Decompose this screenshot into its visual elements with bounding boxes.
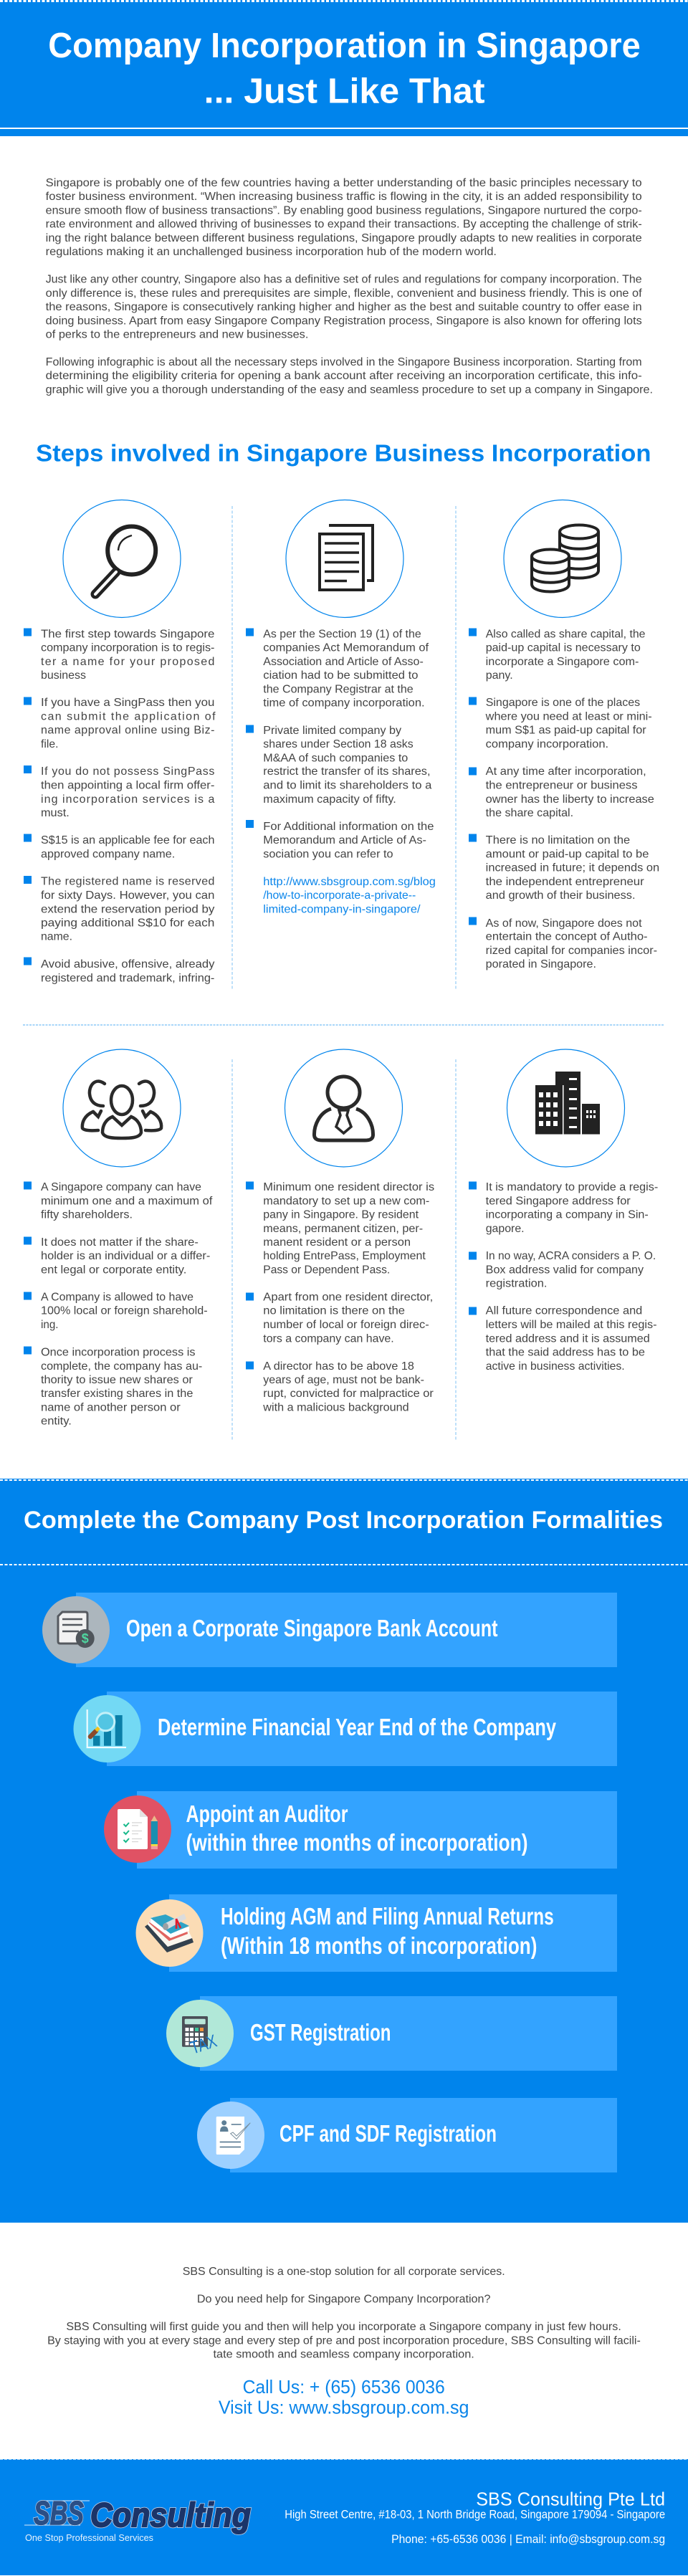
bullet list: paid-up capital: As of now, Singapore does not [486, 917, 642, 930]
bullet list: paid-up capital: pany. [486, 669, 513, 682]
bullet list: shareholders [24, 1181, 213, 1428]
bullet list: name registration: ter a name for your proposed [41, 656, 214, 668]
bullet list: registered address: tered address and it is assumed [486, 1333, 650, 1345]
bullet list: paid-up capital: and growth of their business. [486, 889, 635, 902]
bullet list: directors: mandatory to set up a new com- [263, 1195, 429, 1207]
bullet list: directors [246, 1181, 434, 1413]
bullet list: name registration [24, 628, 216, 984]
bullet list: memorandum and articles: Association and Article of Asso- [263, 656, 424, 668]
closing text block [47, 2266, 641, 2361]
bullet list: shareholders: ing. [41, 1319, 59, 1331]
bullet list: directors: number of local or foreign direc- [263, 1319, 429, 1331]
bullet list: name registration: ing incorporation services is a [41, 793, 214, 806]
bullet list: registered address: In no way, ACRA considers a P. O. [486, 1250, 656, 1262]
bullet list: memorandum and articles: time of company incorporation. [263, 697, 425, 710]
bullet list: registered address: letters will be mailed at this regis- [486, 1319, 656, 1331]
bullet list: paid-up capital: paid-up capital is necessary to [486, 642, 641, 654]
bullet list: paid-up capital: At any time after incorporation, [486, 765, 646, 778]
bullet list: shareholders: 100% local or foreign sharehold- [41, 1305, 208, 1317]
bullet list: memorandum and articles: M&AA of such companies to [263, 752, 408, 764]
logo: SBS Consulting: Consulting [90, 2496, 251, 2534]
intro text block: foster business environment. “When increasing business traffic is flowing in the city, it is an added responsibility to [46, 191, 642, 203]
icon: registration form [197, 2102, 264, 2169]
step text: auditor [186, 1800, 527, 1856]
bullet list: memorandum and articles: the Company Registrar at the [263, 683, 414, 695]
logo: SBS Consulting [24, 2494, 251, 2543]
panel: paid-up capital column [469, 500, 659, 970]
bullet list: registered address: that the said address has to be [486, 1347, 645, 1359]
bullet list: shareholders: fifty shareholders. [41, 1208, 133, 1221]
bullet list: shareholders: A Singapore company can have [41, 1181, 201, 1193]
closing text block: Do you need help for Singapore Company Incorporation? [197, 2294, 491, 2305]
panel: shareholders column [24, 1049, 213, 1428]
bullet list: shareholders: ent legal or corporate entity. [41, 1264, 186, 1276]
intro text block: rate environment and allowed thriving of businesses to expand their transactions. By accepting the challenge of strik- [46, 219, 642, 231]
step: GST registration [166, 1996, 617, 2071]
icon: checklist and pencil [104, 1795, 171, 1863]
closing text block: tate smooth and seamless company incorporation. [214, 2349, 474, 2361]
bullet list: name registration: business [41, 669, 86, 682]
step: AGM and annual returns [136, 1894, 617, 1972]
bullet list: registered address: gapore. [486, 1223, 525, 1235]
bullet list: directors: holding EntrePass, Employment [263, 1250, 426, 1262]
bullet list: memorandum and articles: companies Act Memorandum of [263, 642, 429, 654]
intro text block: Following infographic is about all the necessary steps involved in the Singapore Business incorporation. Starting from [46, 356, 642, 368]
icon: chart with magnifier [73, 1695, 140, 1762]
bullet list: paid-up capital: incorporate a Singapore com- [486, 656, 639, 668]
bullet list: shareholders: Once incorporation process is [41, 1347, 195, 1359]
bullet list: paid-up capital: porated in Singapore. [486, 958, 596, 970]
call to action [219, 2376, 469, 2418]
bullet list: name registration: If you have a SingPass then you [41, 697, 214, 709]
bullet list: name registration: name approval online using Biz- [41, 724, 214, 737]
step text: auditor: (within three months of incorporation) [186, 1829, 527, 1856]
step: CPF and SDF registration [197, 2098, 617, 2172]
bullet list: name registration: extend the reservation period by [41, 903, 214, 915]
icon: office buildings [507, 1049, 625, 1167]
bullet list: memorandum and articles [246, 628, 436, 915]
bullet list: directors: Minimum one resident director is [263, 1181, 434, 1193]
bullet list: name registration: can submit the application of [41, 711, 216, 723]
intro text block: Singapore is probably one of the few countries having a better understanding of the basic principles necessary to [46, 177, 642, 189]
bullet list: shareholders: transfer existing shares in the [41, 1388, 193, 1400]
bullet list: shareholders: holder is an individual or a differ- [41, 1250, 210, 1262]
bullet list: directors: with a malicious background [262, 1401, 409, 1413]
bullet list: directors: pany in Singapore. By resident [263, 1208, 419, 1221]
bullet list: name registration: then appointing a local firm offer- [41, 780, 214, 791]
bullet list: paid-up capital: the entrepreneur or business [486, 780, 638, 791]
bullet list: name registration: S$15 is an applicable fee for each [41, 834, 214, 846]
bullet list: name registration: The first step towards Singapore [41, 628, 214, 640]
step: financial year end [73, 1692, 617, 1766]
step text: AGM: Holding AGM and Filing Annual Returns [221, 1903, 554, 1929]
panel: directors column [246, 1049, 434, 1413]
icon: documents [286, 500, 403, 618]
bullet list: memorandum and articles: For Additional information on the [263, 821, 434, 833]
bullet list: memorandum and articles: sociation you can refer to [263, 848, 393, 860]
step: bank account [42, 1593, 617, 1667]
panel: footer [0, 2459, 688, 2575]
intro text block: of perks to the entrepreneurs and new businesses. [46, 328, 308, 341]
bullet list: shareholders: thority to issue new shares or [41, 1374, 193, 1386]
icon: shareholders group [63, 1049, 181, 1167]
logo: SBS Consulting: One Stop Professional Services [25, 2532, 153, 2543]
closing text block: By staying with you at every stage and every step of pre and post incorporation procedure, SBS Consulting will facili- [47, 2334, 641, 2347]
icon: bank document: $ [82, 1631, 89, 1646]
logo: SBS Consulting: SBS [34, 2494, 84, 2532]
icon: magnifying glass [63, 500, 181, 618]
heading: post incorporation formalities: Complete the Company Post Incorporation Formalities [24, 1507, 663, 1534]
logo: SBS Consulting: SBS [34, 2494, 84, 2532]
bullet list: paid-up capital: the share capital. [486, 807, 573, 819]
bullet list: name registration: registered and trademark, infring- [41, 972, 214, 984]
bullet list: memorandum and articles: maximum capacity of fifty. [263, 793, 396, 806]
bullet list: memorandum and articles: limited-company-in-singapore/ [263, 903, 421, 915]
panel: registered address column [469, 1049, 658, 1373]
icon: calculator with tax [166, 2000, 234, 2067]
contact details [285, 2489, 665, 2546]
bullet list: registered address: active in business activities. [486, 1360, 625, 1373]
bullet list: shareholders: entity. [41, 1415, 72, 1428]
bullet list: directors: tors a company can have. [263, 1333, 394, 1345]
bullet list: paid-up capital: owner has the liberty to increase [486, 793, 654, 806]
call to action: Visit Us: www.sbsgroup.com.sg [219, 2397, 469, 2418]
step: bank account: Open a Corporate Singapore Bank Account [126, 1615, 498, 1641]
bullet list: paid-up capital: rized capital for companies incor- [486, 945, 657, 957]
intro text block: Just like any other country, Singapore also has a definitive set of rules and regulations for company incorporation. The [46, 274, 642, 286]
contact details: Phone: +65-6536 0036 | Email: info@sbsgroup.com.sg [391, 2532, 665, 2546]
bullet list: registered address [469, 1181, 658, 1373]
bullet list: paid-up capital: entertain the concept of Autho- [486, 931, 648, 943]
panel: header banner [0, 0, 688, 136]
bullet list: name registration: paying additional S$10 for each [41, 917, 214, 929]
closing text block: SBS Consulting is a one-stop solution for all corporate services. [183, 2266, 505, 2278]
intro text block [46, 177, 653, 396]
title: ... Just Like That [204, 72, 484, 110]
bullet list: registered address: incorporating a company in Sin- [486, 1208, 649, 1221]
bullet list: paid-up capital: where you need at least or mini- [485, 711, 652, 723]
intro text block: only difference is, these rules and prerequisites are simple, flexible, convenient and business friendly. This is one of [46, 287, 642, 300]
bullet list: directors: Apart from one resident director, [263, 1292, 433, 1304]
bullet list: memorandum and articles: http://www.sbsgroup.com.sg/blog [263, 876, 436, 888]
bullet list: directors: means, permanent citizen, per- [263, 1223, 423, 1235]
bullet list: shareholders: name of another person or [41, 1401, 181, 1413]
bullet list: memorandum and articles: Private limited company by [263, 725, 401, 737]
bullet list: registered address: registration. [486, 1277, 547, 1290]
bullet list: paid-up capital: Singapore is one of the places [486, 697, 640, 709]
bullet list: memorandum and articles: Memorandum and Article of As- [263, 834, 426, 846]
intro text block: doing business. Apart from easy Singapore Company Registration process, Singapore is also known for offering lots [46, 315, 642, 327]
bullet list: memorandum and articles: and to limit its shareholders to a [263, 780, 432, 791]
bullet list: registered address: Box address valid for company [486, 1264, 644, 1276]
bullet list: memorandum and articles: shares under Section 18 asks [263, 738, 414, 750]
panel: company name column [24, 500, 216, 984]
bullet list: paid-up capital: Also called as share capital, the [486, 628, 646, 640]
icon: calculator with tax: TAX [188, 2031, 219, 2059]
icon: bank document [42, 1596, 110, 1664]
bullet list: name registration: name. [41, 931, 72, 943]
logo: SBS Consulting: Consulting [90, 2496, 251, 2534]
bullet list: directors: no limitation is there on the [263, 1305, 405, 1317]
step: appoint auditor [104, 1791, 617, 1869]
bullet list: memorandum and articles: /how-to-incorporate-a-private-- [263, 889, 416, 902]
bullet list: shareholders: minimum one and a maximum of [41, 1195, 213, 1207]
icon: books and diploma [136, 1899, 204, 1967]
panel: memorandum column [246, 500, 436, 915]
bullet list: name registration: for sixty Days. However, you can [41, 889, 214, 902]
bullet list: name registration: If you do not possess SingPass [41, 765, 214, 778]
bullet list: paid-up capital: amount or paid-up capital to be [486, 848, 649, 860]
bullet list: registered address: It is mandatory to provide a regis- [486, 1181, 658, 1193]
intro text block: ing the right balance between different business regulations, Singapore proudly adapts to new realities in corporate [46, 232, 642, 244]
bullet list: paid-up capital [469, 628, 659, 970]
step: GST registration: GST Registration [250, 2019, 391, 2046]
step text: auditor: Appoint an Auditor [186, 1800, 348, 1827]
title [48, 27, 641, 110]
bullet list: directors: years of age, must not be bank- [263, 1374, 424, 1386]
bullet list: directors: Pass or Dependent Pass. [263, 1264, 390, 1276]
bullet list: directors: A director has to be above 18 [263, 1360, 414, 1373]
closing text block: SBS Consulting will first guide you and then will help you incorporate a Singapore company in just few hours. [66, 2321, 621, 2333]
panel: post incorporation section [0, 1479, 688, 2223]
heading: steps involved: Steps involved in Singapore Business Incorporation [36, 439, 651, 466]
bullet list: directors: rupt, convicted for malpractice or [263, 1388, 434, 1400]
bullet list: directors: manent resident or a person [263, 1236, 411, 1249]
intro text block: graphic will give you a thorough understanding of the easy and seamless procedure to set up a company in Singapore. [46, 383, 653, 396]
bullet list: paid-up capital: increased in future; it depends on [486, 862, 659, 874]
intro text block: the reasons, Singapore is consecutively ranking higher and higher as the best and suitable country to offer ease in [46, 301, 642, 313]
contact details: SBS Consulting Pte Ltd [476, 2489, 665, 2510]
bullet list: shareholders: It does not matter if the share- [41, 1236, 199, 1249]
bullet list: name registration: must. [41, 807, 70, 819]
bullet list: shareholders: A Company is allowed to have [41, 1292, 194, 1304]
bullet list: paid-up capital: company incorporation. [486, 738, 608, 750]
step: financial year end: Determine Financial Year End of the Company [158, 1714, 556, 1740]
intro text block: ensure smooth flow of business transactions”. By enabling good business regulations, Singapore nurtured the corpo- [46, 204, 642, 216]
bullet list: name registration: company incorporation is to regis- [41, 642, 214, 654]
bullet list: registered address: tered Singapore address for [486, 1195, 631, 1207]
intro text block: regulations making it an unchallenged business incorporation hub of the modern world. [46, 246, 497, 258]
bullet list: name registration: Avoid abusive, offensive, already [41, 958, 214, 970]
bullet list: memorandum and articles: As per the Section 19 (1) of the [263, 628, 421, 640]
bullet list: paid-up capital: There is no limitation on the [486, 834, 630, 846]
bullet list: name registration: The registered name is reserved [41, 876, 214, 888]
call to action: Call Us: + (65) 6536 0036 [243, 2376, 445, 2398]
bullet list: memorandum and articles: ciation had to be submitted to [263, 669, 418, 682]
bullet list: name registration: file. [41, 738, 59, 750]
step: CPF and SDF registration: CPF and SDF Registration [280, 2120, 497, 2147]
bullet list: memorandum and articles: restrict the transfer of its shares, [263, 765, 430, 778]
bullet list: paid-up capital: the independent entrepreneur [486, 876, 644, 888]
icon: coin stacks [504, 500, 621, 618]
bullet list: shareholders: complete, the company has au- [41, 1360, 202, 1373]
step text: AGM: (Within 18 months of incorporation) [221, 1932, 537, 1959]
bullet list: paid-up capital: mum S$1 as paid-up capital for [486, 724, 646, 737]
icon: director with tie [285, 1049, 403, 1167]
bullet list: name registration: approved company name. [41, 848, 175, 860]
bullet list: registered address: All future correspondence and [486, 1305, 642, 1317]
title: Company Incorporation in Singapore [48, 27, 641, 65]
step text: AGM [221, 1903, 554, 1959]
intro text block: determining the eligibility criteria for opening a bank account after receiving an incorporation certificate, this info- [46, 370, 642, 382]
